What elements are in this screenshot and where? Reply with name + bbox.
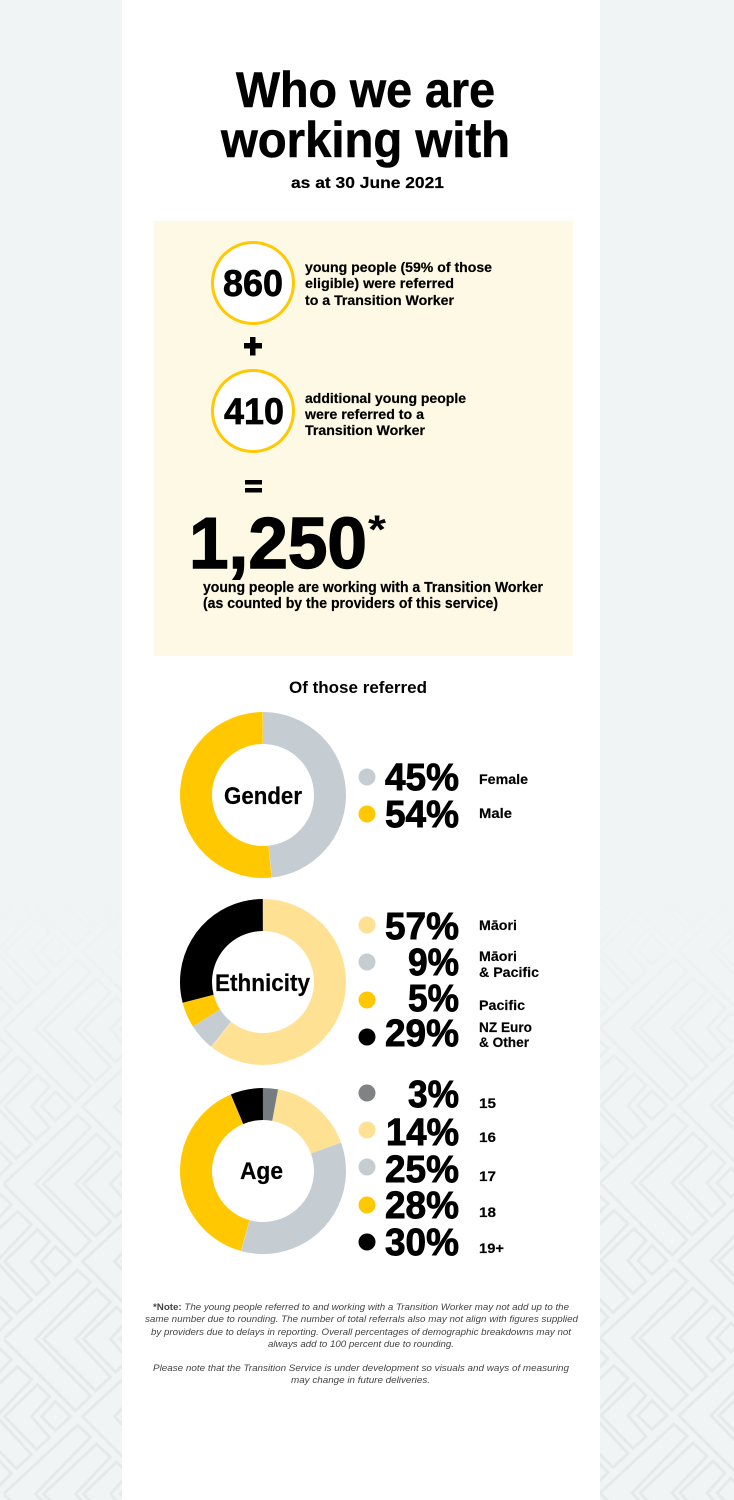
stat: 860 circle: 860 [223, 263, 283, 304]
footnote: by providers due to delays in reporting. Overall percentages of demographic breakdowns may not [151, 1326, 571, 1337]
legend: age [358, 1074, 504, 1264]
chart: gender donut [189, 721, 337, 869]
title: Who we are [236, 62, 495, 118]
footnote: *Note: The young people referred to and working with a Transition Worker may not add up to the [153, 1301, 569, 1312]
footnote [145, 1301, 579, 1385]
chart: age donut [175, 1083, 351, 1259]
footnote: same number due to rounding. The number of total referrals also may not align with figures supplied [145, 1313, 579, 1324]
legend: age: 19+ [479, 1240, 504, 1256]
chart: gender donut: Gender [224, 783, 302, 810]
legend: age: 17 [479, 1168, 496, 1184]
footnote: always add to 100 percent due to rounding. [268, 1338, 454, 1349]
legend: age: 3% [408, 1074, 459, 1116]
text: 860 description: eligible) were referred [305, 275, 454, 291]
stat: 410 circle: 410 [224, 391, 284, 432]
legend: age: 14% [386, 1112, 459, 1154]
footnote: may change in future deliveries. [291, 1374, 430, 1385]
text: total description: (as counted by the providers of this service) [203, 596, 498, 612]
text: total description: young people are working with a Transition Worker [203, 580, 543, 596]
legend: gender: 54% [385, 794, 459, 836]
subtitle date: as at 30 June 2021 [291, 175, 444, 192]
stat: 860 circle [212, 242, 294, 324]
legend: age: 18 [479, 1204, 496, 1220]
legend: ethnicity: 29% [385, 1013, 459, 1055]
stat: 410 circle [212, 370, 294, 452]
legend: ethnicity [358, 906, 539, 1055]
chart: ethnicity donut: Ethnicity [215, 970, 311, 997]
text: 860 description: young people (59% of those [305, 259, 492, 275]
text: 860 description [305, 259, 492, 308]
stat: 1,250 total: * [368, 508, 386, 552]
text: 410 description [304, 390, 466, 438]
legend: ethnicity: 5% [408, 978, 459, 1020]
stat: 1,250 total: 1,250 [189, 504, 367, 584]
legend: gender: 45% [385, 757, 459, 799]
text: total description [203, 580, 543, 612]
legend: ethnicity: NZ Euro [479, 1019, 532, 1035]
title [220, 62, 510, 168]
title: working with [220, 112, 510, 168]
legend: ethnicity: 9% [408, 942, 459, 984]
legend: gender [358, 757, 528, 836]
main white panel [122, 0, 600, 1500]
icon: equals [245, 480, 262, 492]
legend: age: 15 [479, 1095, 496, 1111]
legend: ethnicity: Māori [479, 917, 517, 933]
icon: plus [244, 337, 262, 356]
text: 410 description: Transition Worker [305, 422, 426, 438]
legend: ethnicity: Pacific [479, 997, 525, 1013]
heading: of those referred: Of those referred [289, 678, 427, 697]
text: 410 description: were referred to a [304, 406, 424, 422]
legend: gender: Male [479, 805, 512, 821]
legend: ethnicity: & Pacific [479, 964, 539, 980]
panel: referral totals [154, 221, 573, 656]
legend: age: 25% [385, 1149, 459, 1191]
legend: age: 16 [479, 1129, 496, 1145]
legend: ethnicity: 57% [385, 906, 459, 948]
legend: ethnicity: & Other [479, 1034, 530, 1050]
text: 860 description: to a Transition Worker [305, 292, 455, 308]
legend: age: 28% [385, 1185, 459, 1227]
legend: age: 30% [385, 1222, 459, 1264]
chart: ethnicity donut [169, 888, 357, 1076]
legend: gender: Female [479, 771, 528, 787]
text: 410 description: additional young people [305, 390, 466, 406]
legend: ethnicity: Māori [479, 948, 517, 964]
footnote: Please note that the Transition Service is under development so visuals and ways of measuring [153, 1362, 570, 1373]
chart: age donut: Age [240, 1158, 283, 1185]
